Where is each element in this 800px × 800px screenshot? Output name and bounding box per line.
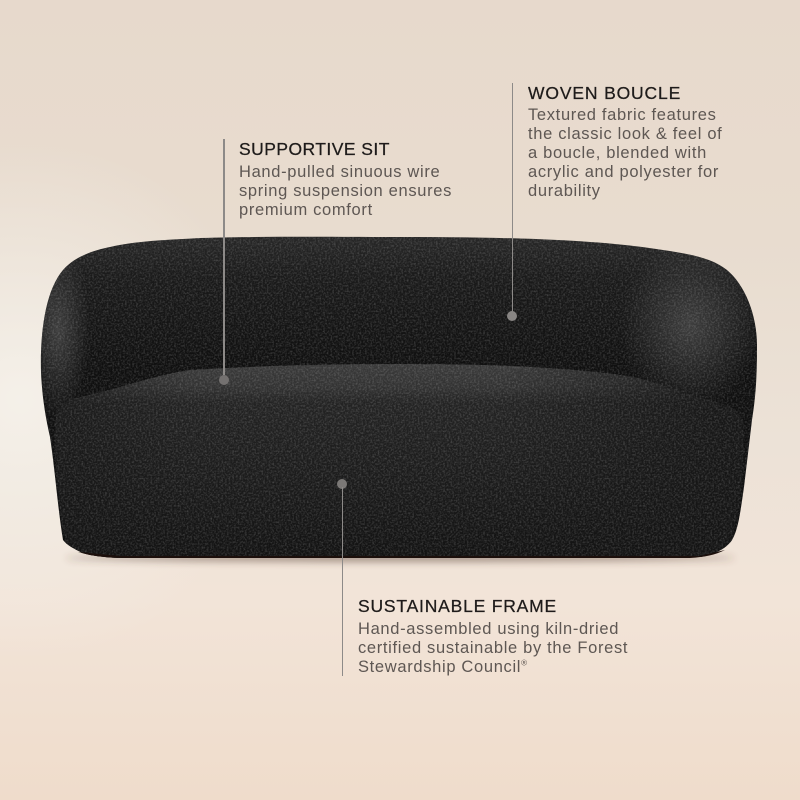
text: woven boucle — [528, 106, 722, 200]
leader line: supportive sit — [223, 139, 225, 375]
heading: woven boucle: WOVEN BOUCLE — [528, 83, 681, 103]
text: woven boucle: Textured fabric features — [528, 106, 717, 124]
text: supportive sit: spring suspension ensures — [239, 182, 452, 200]
callout: sustainable frame — [337, 479, 628, 676]
marker dot: woven boucle — [507, 311, 517, 321]
heading: sustainable frame: SUSTAINABLE FRAME — [358, 596, 557, 616]
heading: supportive sit: SUPPORTIVE SIT — [239, 139, 390, 159]
text: woven boucle: durability — [528, 182, 601, 200]
text: sustainable frame — [358, 620, 628, 676]
seat end shading — [55, 364, 744, 558]
floor shadow — [65, 555, 735, 561]
callout: woven boucle — [507, 83, 722, 321]
marker dot: sustainable frame — [337, 479, 347, 489]
text: woven boucle: acrylic and polyester for — [528, 163, 719, 181]
text: supportive sit — [239, 162, 452, 219]
seat cushion — [55, 364, 744, 558]
text: woven boucle: the classic look & feel of — [528, 125, 722, 143]
text: sustainable frame: certified sustainable by the Forest — [358, 639, 628, 657]
callout: supportive sit — [219, 139, 452, 385]
marker dot: supportive sit — [219, 375, 229, 385]
leader line: sustainable frame — [342, 487, 343, 676]
text: sustainable frame: Hand-assembled using kiln-dried — [358, 620, 619, 638]
sofa — [26, 237, 760, 558]
text: sustainable frame: Stewardship Council® — [358, 658, 528, 676]
text: supportive sit: premium comfort — [239, 201, 373, 219]
arm highlights — [40, 262, 746, 404]
sofa base — [78, 550, 725, 558]
text: woven boucle: a boucle, blended with — [528, 144, 707, 162]
sofa back and arms — [41, 237, 757, 558]
leader line: woven boucle — [512, 83, 513, 313]
background and sofa illustration — [0, 236, 800, 800]
text: supportive sit: Hand-pulled sinuous wire — [239, 162, 440, 180]
